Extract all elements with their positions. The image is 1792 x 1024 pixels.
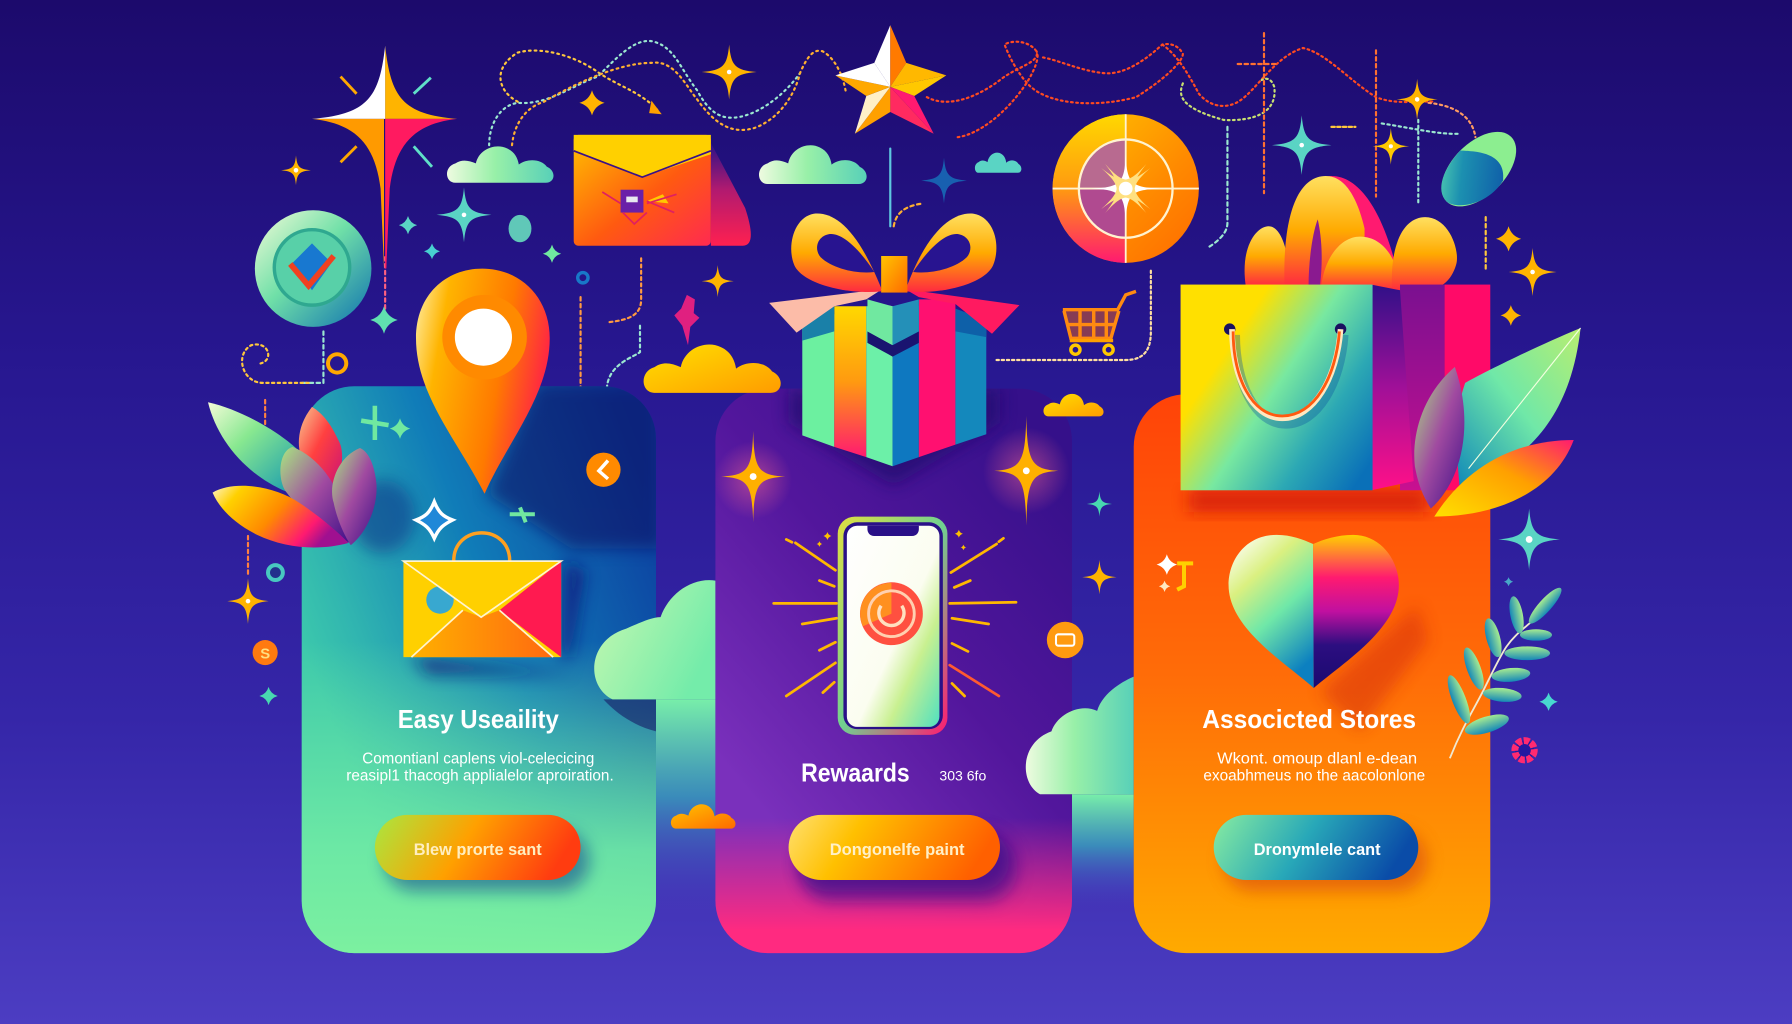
icon: check badge bbox=[255, 210, 371, 327]
rays bbox=[774, 538, 1016, 696]
cloud: small orange bbox=[671, 804, 736, 829]
icon: leaves right bbox=[1414, 328, 1581, 517]
text: associcted stores description: Wkont. omoup dlanl e-dean bbox=[1217, 750, 1417, 767]
icon: orange S coin: S bbox=[260, 646, 270, 662]
text: easy useaility description bbox=[346, 750, 614, 785]
text: easy useaility description: Comontianl caplens viol-celecicing bbox=[362, 750, 594, 767]
lid bbox=[867, 299, 893, 345]
box faces bbox=[802, 314, 834, 447]
icon: envelope in panel 1 bbox=[403, 533, 561, 657]
icon: orange badge on panel 1 bbox=[586, 453, 621, 487]
cloud: small yellow right of gift bbox=[1044, 394, 1104, 416]
button: panel 3 bbox=[1214, 815, 1427, 891]
panel 1 card bbox=[302, 383, 663, 953]
handle bbox=[1224, 323, 1235, 335]
body bbox=[838, 517, 947, 735]
button: panel 1 bbox=[375, 815, 590, 891]
button: panel 3: Dronymlele cant bbox=[1254, 840, 1381, 859]
front bbox=[1181, 285, 1373, 490]
flap bbox=[403, 561, 561, 617]
cloud: top centre bbox=[759, 145, 867, 184]
text: associcted stores description: exoabhmeus no the aacolonlone bbox=[1203, 768, 1425, 785]
panel 2 card bbox=[715, 389, 1072, 953]
cloud: white-green beside panel 2 bbox=[1026, 677, 1134, 909]
icon: big four-point star bbox=[312, 46, 457, 269]
icon: pink flower bbox=[1515, 741, 1534, 760]
text: easy useaility heading: Easy Useaility bbox=[398, 704, 559, 734]
icon: leafy branch bbox=[1443, 584, 1565, 758]
panel: rewaards bbox=[715, 389, 1072, 953]
back and gusset bbox=[1400, 285, 1445, 490]
ribbon tails bbox=[769, 289, 882, 333]
cloud: large green beside panel 1 bbox=[594, 580, 715, 917]
text: rewaards heading: Rewaards bbox=[801, 758, 910, 788]
icon: panel 2 gold sparkles bbox=[714, 416, 1070, 526]
icon: envelope top bbox=[574, 135, 751, 246]
icon: flower of leaves, left bbox=[208, 402, 377, 547]
icon: green oval bbox=[1428, 118, 1530, 220]
icon: shopping cart bbox=[1063, 291, 1136, 354]
icon: heart bbox=[1229, 535, 1399, 688]
bow loops bbox=[791, 214, 881, 292]
button: panel 2: Dongonelfe paint bbox=[830, 840, 965, 859]
icon: white outline star bbox=[416, 502, 453, 538]
icon: centre star bbox=[835, 25, 946, 134]
icon: location pin bbox=[416, 269, 550, 494]
cloud: yellow bbox=[644, 344, 781, 393]
icon: shopping bag bbox=[1181, 176, 1490, 490]
logo bbox=[860, 582, 923, 645]
text: rewaards small figure: 303 6fo bbox=[939, 769, 987, 784]
panel: associcted stores bbox=[1134, 394, 1490, 953]
handle bbox=[454, 533, 510, 561]
cloud: small teal bbox=[975, 153, 1021, 173]
icon: smartphone with rays bbox=[774, 517, 1016, 735]
icon: orange coupon badge bbox=[1047, 622, 1083, 658]
icon: gift box bbox=[769, 214, 1019, 466]
icon: compass bbox=[1053, 114, 1199, 263]
icon: pink lantern bbox=[674, 295, 699, 345]
cloud: top left bbox=[447, 146, 554, 183]
sparkles bbox=[227, 45, 1560, 711]
panel 3 card bbox=[1134, 394, 1490, 953]
icon: orange S coin bbox=[253, 640, 278, 665]
body bbox=[403, 561, 561, 657]
text: associcted stores heading: Associcted Stores bbox=[1202, 704, 1416, 734]
button: panel 1: Blew prorte sant bbox=[414, 840, 542, 859]
icon: glyph marks on panel 3 bbox=[1157, 554, 1193, 592]
text: easy useaility description: reasipl1 thacogh applialelor aproiration. bbox=[346, 768, 614, 785]
panel: easy useaility bbox=[302, 383, 663, 953]
tissue paper bbox=[1245, 226, 1291, 286]
button: panel 2 bbox=[789, 815, 1009, 891]
dotted connector lines bbox=[242, 33, 1486, 574]
text: associcted stores description bbox=[1203, 750, 1425, 785]
